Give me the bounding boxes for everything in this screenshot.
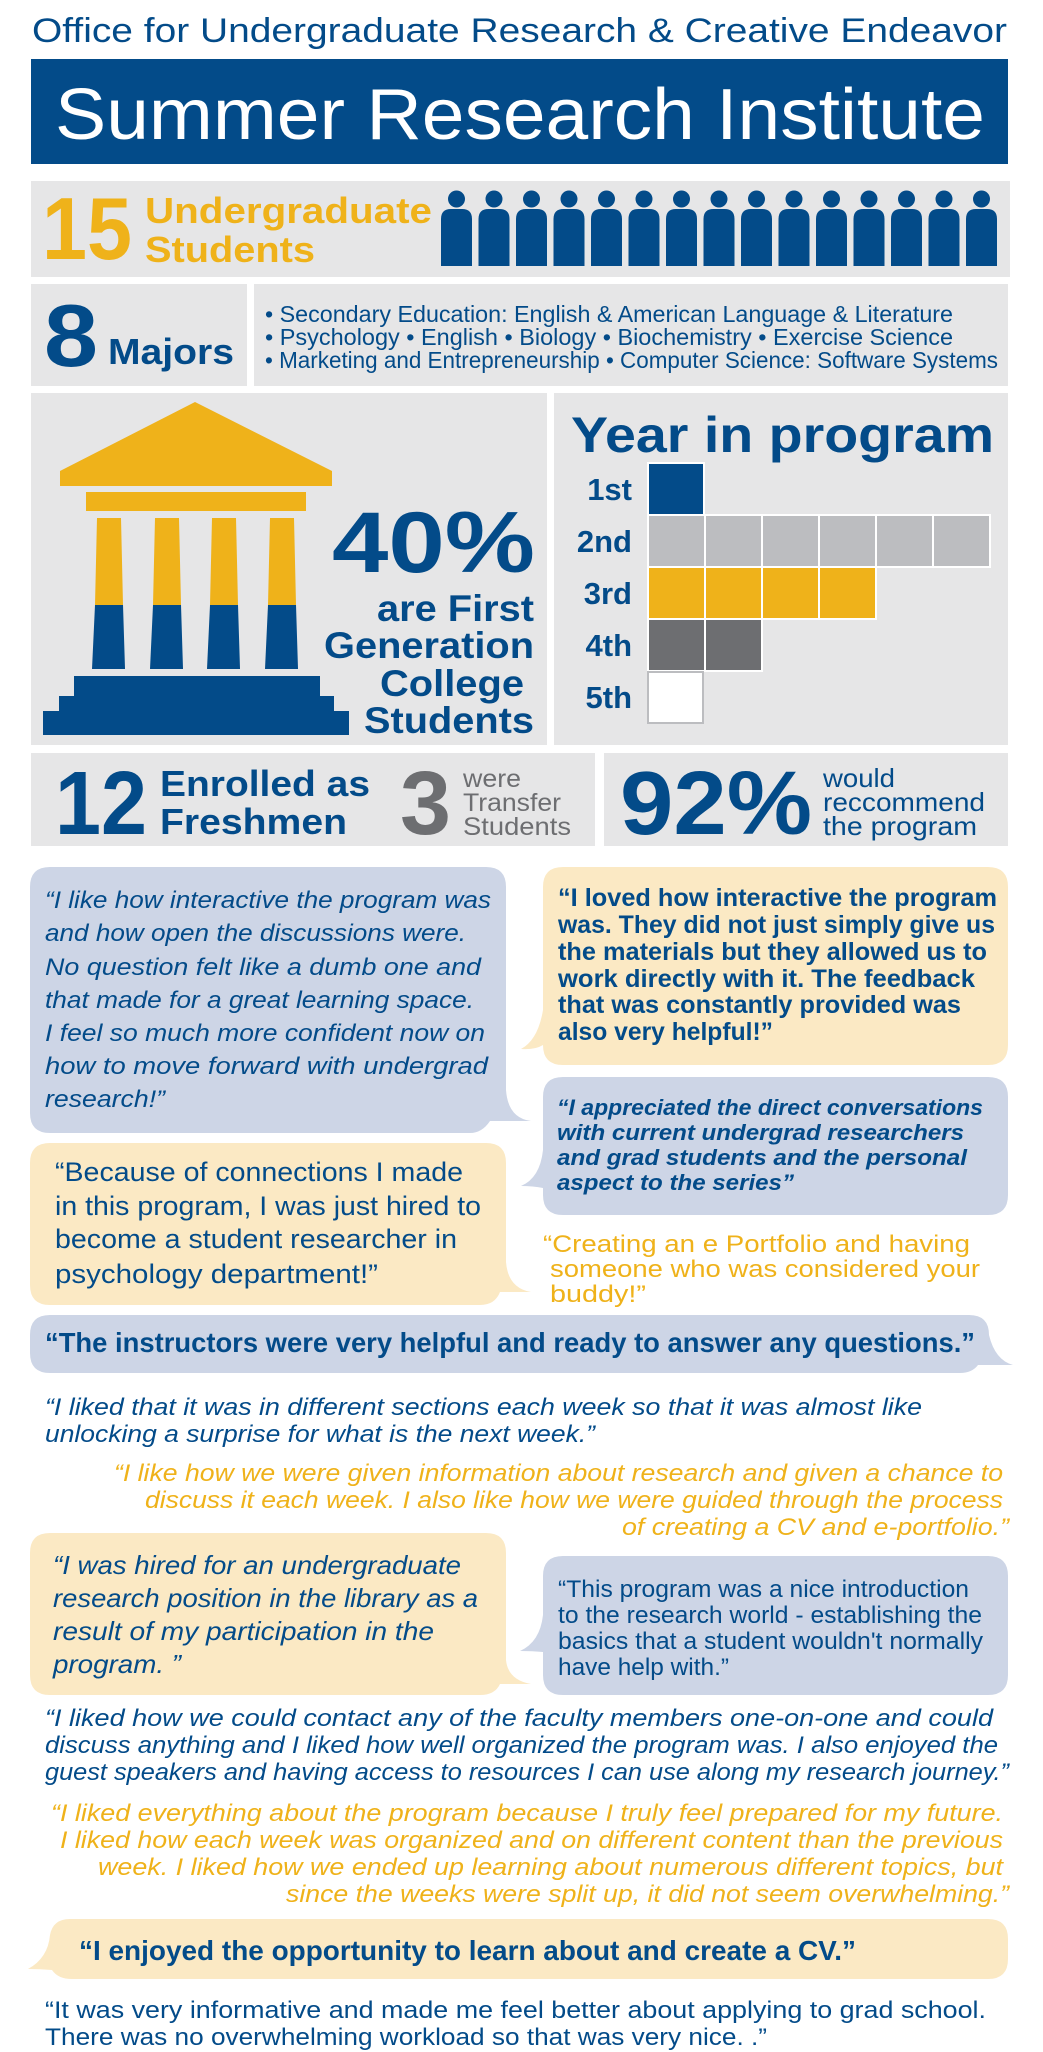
quote bubble: nice introduction bbox=[520, 1556, 1008, 1695]
panel: year in program chart: Year in program bbox=[571, 407, 994, 463]
panel: 8 majors bbox=[31, 284, 247, 386]
quote bubble: hired in library: research position in the library as a bbox=[53, 1583, 478, 1613]
quote: information about research: “I like how we were given information about research and given a chance to bbox=[114, 1460, 1003, 1487]
panel: majors list: • Marketing and Entrepreneurship • Computer Science: Software Systems bbox=[265, 347, 998, 373]
title banner bbox=[31, 59, 1008, 164]
text: first generation college students: Generation bbox=[324, 625, 534, 666]
quote bubble: direct conversations bbox=[521, 1077, 1008, 1215]
quote bubble: direct conversations: aspect to the series” bbox=[557, 1170, 794, 1195]
quote bubble: interactive discussions: that made for a great learning space. bbox=[45, 987, 474, 1014]
quote: information about research: discuss it each week. I also like how we were guided through the process bbox=[145, 1487, 1003, 1514]
text: first generation college students: Students bbox=[364, 700, 534, 741]
quote bubble: hired as student researcher: “Because of connections I made bbox=[55, 1157, 463, 1187]
quote bubble: interactive discussions: I feel so much more confident now on bbox=[45, 1020, 485, 1047]
stat: 40%: 40% bbox=[332, 495, 535, 591]
quote: e-portfolio buddy: someone who was considered your bbox=[550, 1256, 980, 1283]
quote bubble: hired as student researcher: psychology department!” bbox=[55, 1259, 378, 1289]
panel: majors list: • Secondary Education: English & American Language & Literature bbox=[265, 301, 953, 327]
quote: e-portfolio buddy: buddy!” bbox=[550, 1281, 646, 1308]
panel: enrolled and transfer: 12 bbox=[55, 754, 147, 854]
quote bubble: create a CV bbox=[28, 1919, 1008, 1979]
text: first generation college students bbox=[324, 588, 534, 741]
panel: 92% recommend bbox=[604, 753, 1008, 854]
quote: different sections each week: “I liked that it was in different sections each week so that it was almost like bbox=[45, 1394, 922, 1421]
panel: 8 majors: Majors bbox=[108, 331, 234, 372]
header: office name: Office for Undergraduate Research & Creative Endeavor bbox=[32, 12, 1007, 50]
quote: different sections each week: unlocking a surprise for what is the next week.” bbox=[45, 1421, 596, 1448]
panel: 92% recommend: reccommend bbox=[823, 787, 985, 817]
quote bubble: nice introduction: to the research world - establishing the bbox=[558, 1602, 982, 1629]
quote: everything about the program: I liked how each week was organized and on different content than the previous bbox=[60, 1827, 1003, 1854]
quote bubble: loved interactive: also very helpful!” bbox=[558, 1018, 773, 1046]
panel: first generation bbox=[31, 393, 547, 745]
quote: information about research bbox=[114, 1460, 1010, 1541]
quote bubble: hired as student researcher: become a student researcher in bbox=[55, 1224, 457, 1254]
panel: 15 undergraduate students bbox=[31, 179, 1010, 278]
quote bubble: hired as student researcher bbox=[30, 1143, 531, 1305]
panel: 15 undergraduate students: Undergraduate bbox=[145, 190, 432, 231]
quote bubble: interactive discussions: how to move forward with undergrad bbox=[45, 1053, 489, 1080]
icon: temple bbox=[43, 402, 349, 735]
quote bubble: loved interactive: work directly with it. The feedback bbox=[557, 965, 975, 993]
quote: faculty one-on-one: guest speakers and having access to resources I can use along my research journey.” bbox=[45, 1759, 1010, 1786]
panel: year in program chart: 3rd bbox=[584, 576, 632, 611]
quote bubble: loved interactive bbox=[521, 867, 1008, 1065]
quote: grad school bbox=[45, 1997, 986, 2051]
quote bubble: create a CV: “I enjoyed the opportunity to learn about and create a CV.” bbox=[79, 1935, 856, 1966]
panel: enrolled and transfer: Enrolled as bbox=[160, 763, 370, 804]
quote bubble: nice introduction: “This program was a nice introduction bbox=[558, 1576, 969, 1603]
panel: 15 undergraduate students: 15 bbox=[42, 179, 132, 278]
quote bubble: interactive discussions: and how open the discussions were. bbox=[45, 920, 466, 947]
panel: enrolled and transfer: Transfer bbox=[463, 789, 561, 817]
quote bubble: loved interactive: that was constantly provided was bbox=[558, 991, 961, 1019]
panel: year in program chart: 1st bbox=[587, 472, 632, 507]
panel: year in program chart bbox=[554, 393, 1008, 745]
icon: 15 people bbox=[441, 190, 997, 266]
quote: faculty one-on-one: discuss anything and I liked how well organized the program was. I also enjoyed the bbox=[45, 1732, 998, 1759]
quote bubble: hired in library: program. ” bbox=[52, 1649, 182, 1679]
panel: 92% recommend: would bbox=[822, 763, 895, 793]
quote bubble: loved interactive: the materials but they allowed us to bbox=[558, 938, 987, 966]
title banner: Summer Research Institute bbox=[55, 75, 985, 155]
text: first generation college students: are First bbox=[377, 588, 534, 629]
panel: year in program chart: 2nd bbox=[577, 524, 632, 559]
quote: everything about the program: since the weeks were split up, it did not seem overwhelming.” bbox=[286, 1881, 1010, 1908]
panel: enrolled and transfer: Students bbox=[463, 813, 571, 841]
quote: faculty one-on-one bbox=[45, 1705, 1010, 1786]
quote bubble: hired in library: “I was hired for an undergraduate bbox=[53, 1550, 461, 1580]
panel: 92% recommend: 92% bbox=[620, 754, 812, 854]
panel: enrolled and transfer: 3 bbox=[400, 754, 451, 854]
panel: year in program chart: 5th bbox=[586, 680, 632, 715]
quote: e-portfolio buddy bbox=[543, 1231, 980, 1308]
quote bubble: hired in library bbox=[30, 1533, 531, 1695]
text: first generation college students: College bbox=[380, 663, 524, 704]
panel: majors list: • Psychology • English • Biology • Biochemistry • Exercise Science bbox=[265, 324, 953, 350]
quote bubble: instructors helpful bbox=[30, 1315, 1013, 1373]
quote bubble: loved interactive: was. They did not just simply give us bbox=[557, 911, 995, 939]
panel: year in program chart: 4th bbox=[586, 628, 632, 663]
quote bubble: interactive discussions: No question felt like a dumb one and bbox=[45, 954, 482, 981]
quote bubble: direct conversations: “I appreciated the direct conversations bbox=[557, 1095, 983, 1120]
quote: information about research: of creating a CV and e-portfolio.” bbox=[622, 1514, 1010, 1541]
quote bubble: nice introduction: have help with.” bbox=[558, 1654, 729, 1681]
quote bubble: nice introduction: basics that a student wouldn't normally bbox=[558, 1628, 983, 1655]
quote bubble: hired in library: result of my participation in the bbox=[53, 1616, 434, 1646]
panel: enrolled and transfer bbox=[31, 753, 595, 854]
quote: grad school: “It was very informative and made me feel better about applying to grad school. bbox=[45, 1997, 986, 2024]
quote bubble: loved interactive: “I loved how interactive the program bbox=[558, 884, 997, 912]
quote: everything about the program: “I liked everything about the program because I truly feel prepared for my future. bbox=[51, 1800, 1003, 1827]
quote bubble: hired as student researcher: in this program, I was just hired to bbox=[55, 1191, 481, 1221]
panel: majors list bbox=[254, 284, 1008, 386]
quote: different sections each week bbox=[45, 1394, 922, 1448]
panel: enrolled and transfer: Freshmen bbox=[160, 801, 347, 842]
quote bubble: direct conversations: and grad students and the personal bbox=[557, 1145, 968, 1170]
quote: faculty one-on-one: “I liked how we could contact any of the faculty members one-on-one and could bbox=[45, 1705, 994, 1732]
quote bubble: interactive discussions: research!” bbox=[45, 1086, 166, 1113]
quote bubble: instructors helpful: “The instructors were very helpful and ready to answer any questions.” bbox=[45, 1327, 975, 1358]
panel: 92% recommend: the program bbox=[823, 811, 977, 841]
panel: enrolled and transfer: were bbox=[462, 765, 521, 793]
quote bubble: direct conversations: with current undergrad researchers bbox=[557, 1120, 964, 1145]
quote: e-portfolio buddy: “Creating an e Portfolio and having bbox=[543, 1231, 970, 1258]
quote: grad school: There was no overwhelming workload so that was very nice. .” bbox=[45, 2024, 767, 2051]
quote bubble: interactive discussions bbox=[30, 867, 531, 1133]
quote: everything about the program bbox=[51, 1800, 1010, 1908]
quote: everything about the program: week. I liked how we ended up learning about numerous different topics, but bbox=[98, 1854, 1004, 1881]
panel: 15 undergraduate students: Students bbox=[145, 229, 315, 270]
panel: 8 majors: 8 bbox=[44, 286, 98, 385]
quote bubble: interactive discussions: “I like how interactive the program was bbox=[45, 887, 491, 914]
